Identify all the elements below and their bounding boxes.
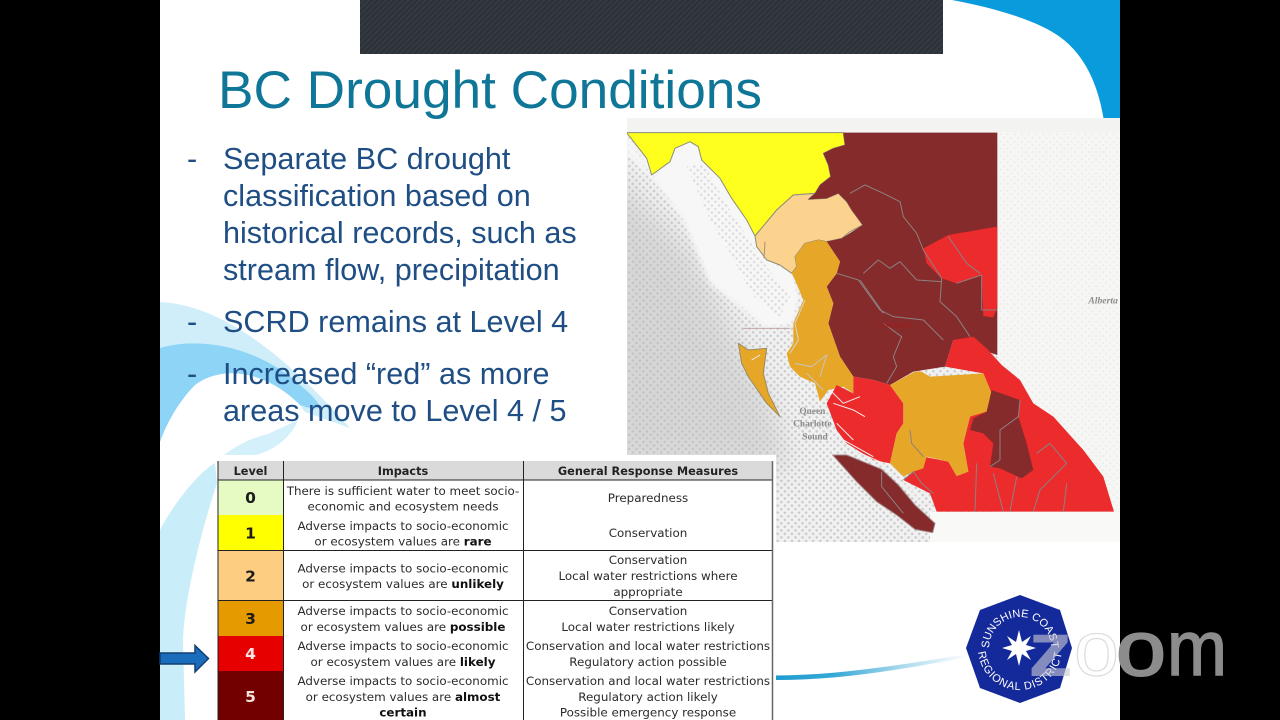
decorative swoosh: top right xyxy=(952,0,1120,118)
drought level table xyxy=(217,455,776,720)
response measures column: Local water restrictions likely xyxy=(561,620,735,634)
level colour cells: 0 xyxy=(245,489,256,507)
response measures column: Local water restrictions where xyxy=(558,569,738,583)
region: level 4 southeast xyxy=(903,337,1114,512)
response measures column: appropriate xyxy=(613,585,683,599)
map labels: Sound xyxy=(802,433,829,443)
bullet: SCRD level: - xyxy=(187,305,197,339)
bullet: classification: classification based on xyxy=(223,179,531,213)
decorative swoosh: bottom right xyxy=(776,654,968,680)
bullet: increased red: Increased “red” as more xyxy=(223,357,549,391)
bullet: classification: Separate BC drought xyxy=(223,142,511,176)
zoom watermark: o xyxy=(1074,604,1119,692)
level colour cells: 5 xyxy=(245,688,256,706)
zoom watermark: z xyxy=(1028,605,1073,693)
level colour cells: 3 xyxy=(245,610,256,628)
impacts column: There is sufficient water to meet socio- xyxy=(286,484,519,498)
arrow pointing to level 4 xyxy=(160,646,208,672)
inlets xyxy=(752,300,930,507)
level colour cells: 4 xyxy=(245,645,256,663)
bullet: classification: stream flow, precipitation xyxy=(223,253,560,287)
impacts column: or ecosystem values are rare xyxy=(314,534,492,548)
level colour cells xyxy=(218,480,283,720)
response measures column: Conservation and local water restrictions xyxy=(526,674,770,688)
response measures column: Conservation xyxy=(609,553,687,567)
impacts column: Adverse impacts to socio-economic xyxy=(297,674,509,688)
impacts column: Adverse impacts to socio-economic xyxy=(297,639,509,653)
response measures column: Preparedness xyxy=(608,491,688,505)
bullet: increased red: areas move to Level 4 / 5 xyxy=(223,394,567,428)
bullet: classification: historical records, such as xyxy=(223,216,577,250)
response measures column: Regulatory action possible xyxy=(569,655,727,669)
region: level 5 northern interior xyxy=(808,133,997,385)
header row: Level xyxy=(234,465,267,478)
logo text: SUNSHINE COAST xyxy=(982,609,1059,648)
bullet: classification: - xyxy=(187,142,197,176)
impacts column: or ecosystem values are unlikely xyxy=(302,577,504,591)
response measures column: Possible emergency response xyxy=(560,706,736,720)
land northwest xyxy=(627,133,798,328)
level colour cells: 1 xyxy=(245,524,256,542)
map labels xyxy=(793,295,1118,443)
region: level 4 south coast xyxy=(827,377,903,463)
slide background xyxy=(160,0,1120,720)
logo star xyxy=(1002,630,1036,666)
table grid xyxy=(218,461,773,720)
impacts column: or ecosystem values are almost xyxy=(306,690,501,704)
impacts column: or ecosystem values are likely xyxy=(311,655,496,669)
zoom watermark: m xyxy=(1167,604,1227,692)
logo text xyxy=(978,609,1062,690)
zoom watermark xyxy=(1028,604,1227,693)
header row xyxy=(218,461,773,480)
region: level 2 light orange xyxy=(755,193,863,273)
map labels: Charlotte xyxy=(793,420,832,430)
impacts column: Adverse impacts to socio-economic xyxy=(297,604,509,618)
region: level 3 Haida Gwaii xyxy=(738,343,780,417)
impacts column xyxy=(286,484,519,720)
region: level 5 Vancouver Island xyxy=(833,455,935,533)
map of BC drought levels xyxy=(600,118,1120,542)
region: level 1 yellow xyxy=(627,133,845,236)
region: level 4 northeast xyxy=(923,227,997,317)
impacts column: Adverse impacts to socio-economic xyxy=(297,519,509,533)
bullet: increased red: - xyxy=(187,357,197,391)
bullet: classification xyxy=(187,142,577,287)
response measures column: Regulatory action likely xyxy=(578,690,718,704)
response measures column: Conservation xyxy=(609,604,687,618)
zoom watermark: o xyxy=(1116,604,1166,692)
map labels: Columbia xyxy=(875,319,912,329)
logo: Sunshine Coast Regional District xyxy=(966,595,1072,703)
map labels: Queen xyxy=(799,407,826,417)
region: level 3 interior xyxy=(890,372,992,477)
title: BC Drought Conditions xyxy=(218,61,762,120)
bullet: SCRD level: SCRD remains at Level 4 xyxy=(223,305,568,339)
response measures column: Conservation and local water restrictions xyxy=(526,639,770,653)
impacts column: or ecosystem values are possible xyxy=(301,620,505,634)
regional boundaries xyxy=(743,185,1067,513)
header row: General Response Measures xyxy=(558,465,738,478)
logo text: REGIONAL DISTRICT xyxy=(978,651,1062,690)
map labels: Alberta xyxy=(1087,295,1118,306)
impacts column: certain xyxy=(379,706,427,720)
region: level 5 Kootenay xyxy=(970,390,1033,478)
top dark video bar xyxy=(360,0,943,54)
bullet: increased red xyxy=(187,357,567,428)
bullet list xyxy=(187,142,577,428)
impacts column: Adverse impacts to socio-economic xyxy=(297,562,509,576)
region: level 3 coast xyxy=(787,240,853,402)
impacts column: economic and ecosystem needs xyxy=(307,500,499,514)
response measures column xyxy=(526,491,770,720)
level colour cells: 2 xyxy=(245,568,256,586)
header row: Impacts xyxy=(378,465,429,478)
response measures column: Conservation xyxy=(609,526,687,540)
decorative swoosh: left xyxy=(160,302,350,720)
